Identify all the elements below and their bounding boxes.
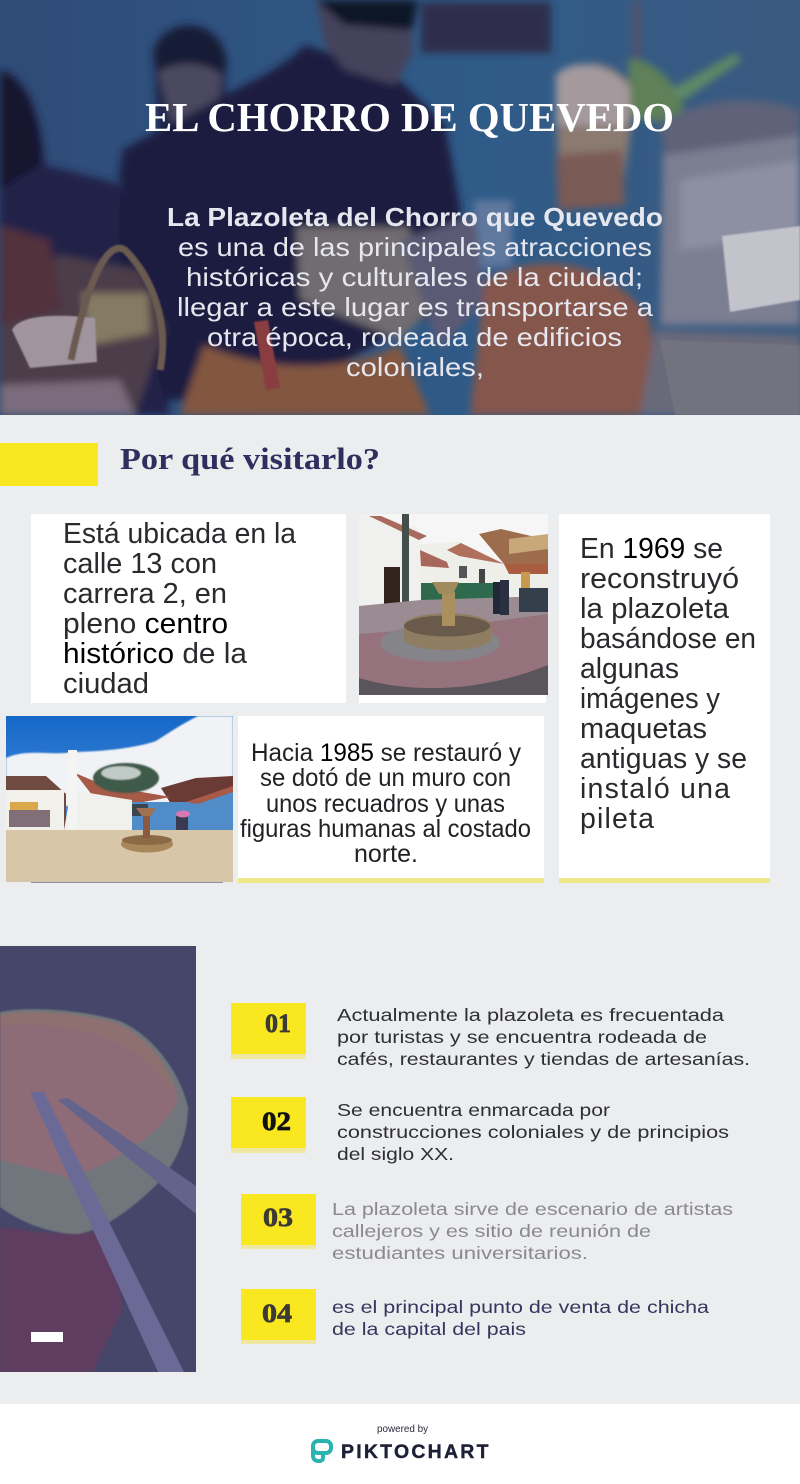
list item 01 bbox=[231, 1003, 750, 1069]
photo: fuente en la plazoleta bbox=[359, 514, 548, 703]
list item 02: 02 bbox=[262, 1107, 291, 1136]
card: ubicación: Está ubicada en la bbox=[63, 518, 296, 550]
section heading: Por qué visitarlo? bbox=[120, 441, 380, 476]
card: restauración 1985: se dotó de un muro con bbox=[260, 764, 511, 792]
list item 03 bbox=[241, 1194, 733, 1263]
intro text block bbox=[167, 202, 663, 382]
panel: hero header bbox=[0, 0, 800, 415]
list item 02: Se encuentra enmarcada por bbox=[337, 1100, 610, 1120]
footer bbox=[0, 1404, 800, 1484]
list item 02 bbox=[231, 1097, 729, 1164]
photo panel: chicha en totuma bbox=[0, 946, 196, 1372]
list item 01: por turistas y se encuentra rodeada de bbox=[337, 1027, 707, 1047]
card: ubicación: pleno centro bbox=[63, 608, 228, 640]
card: restauración 1985 bbox=[238, 716, 544, 883]
list item 04: de la capital del pais bbox=[332, 1319, 526, 1339]
card: restauración 1985: Hacia 1985 se restauró y bbox=[251, 739, 521, 767]
intro text block: es una de las principales atracciones bbox=[178, 232, 652, 262]
card: restauración 1985: unos recuadros y unas bbox=[266, 790, 505, 818]
card: ubicación: ciudad bbox=[63, 668, 149, 700]
card: reconstrucción 1969: la plazoleta bbox=[580, 593, 729, 625]
small white label bbox=[31, 1332, 63, 1342]
card: reconstrucción 1969: antiguas y se bbox=[580, 743, 747, 775]
list item 02: construcciones coloniales y de principios bbox=[337, 1122, 729, 1142]
list item 04: 04 bbox=[262, 1299, 292, 1328]
list item 03: callejeros y es sitio de reunión de bbox=[332, 1221, 651, 1241]
card: ubicación: histórico de la bbox=[63, 638, 247, 670]
intro text block: coloniales, bbox=[346, 352, 484, 382]
intro text block: históricas y culturales de la ciudad; bbox=[186, 262, 643, 292]
intro text block: llegar a este lugar es transportarse a bbox=[177, 292, 654, 322]
list item 03: La plazoleta sirve de escenario de artistas bbox=[332, 1199, 733, 1219]
card: reconstrucción 1969: reconstruyó bbox=[580, 563, 739, 595]
card: reconstrucción 1969: imágenes y bbox=[580, 683, 721, 715]
card: reconstrucción 1969: pileta bbox=[580, 803, 654, 835]
list item 02: del siglo XX. bbox=[337, 1144, 454, 1164]
list item 04: es el principal punto de venta de chicha bbox=[332, 1297, 709, 1317]
photo: plazoleta con cielo azul bbox=[6, 716, 233, 883]
powered by label: powered by bbox=[377, 1424, 428, 1435]
card: reconstrucción 1969: maquetas bbox=[580, 713, 707, 745]
piktochart wordmark: PIKTOCHART bbox=[341, 1441, 490, 1463]
card: ubicación: calle 13 con bbox=[63, 548, 217, 580]
card: ubicación: carrera 2, en bbox=[63, 578, 227, 610]
list item 01: cafés, restaurantes y tiendas de artesanías. bbox=[337, 1049, 750, 1069]
title: EL CHORRO DE QUEVEDO bbox=[145, 94, 674, 140]
icon: piktochart logo bbox=[313, 1441, 331, 1461]
list item 04 bbox=[241, 1289, 709, 1344]
card: ubicación bbox=[31, 514, 346, 703]
card: reconstrucción 1969: En 1969 se bbox=[580, 533, 723, 565]
card: reconstrucción 1969 bbox=[559, 514, 770, 883]
card: restauración 1985: norte. bbox=[354, 840, 418, 868]
intro text block: La Plazoleta del Chorro que Quevedo bbox=[167, 202, 663, 232]
section accent bar bbox=[0, 443, 98, 486]
list item 01: 01 bbox=[265, 1009, 291, 1038]
card: restauración 1985: figuras humanas al costado bbox=[240, 815, 531, 843]
list item 03: 03 bbox=[263, 1203, 293, 1232]
card: reconstrucción 1969: basándose en bbox=[580, 623, 756, 655]
hero background photo bbox=[0, 0, 800, 415]
list item 01: Actualmente la plazoleta es frecuentada bbox=[337, 1005, 724, 1025]
list item 03: estudiantes universitarios. bbox=[332, 1243, 588, 1263]
card: reconstrucción 1969: instaló una bbox=[580, 773, 730, 805]
card: reconstrucción 1969: algunas bbox=[580, 653, 679, 685]
intro text block: otra época, rodeada de edificios bbox=[207, 322, 622, 352]
